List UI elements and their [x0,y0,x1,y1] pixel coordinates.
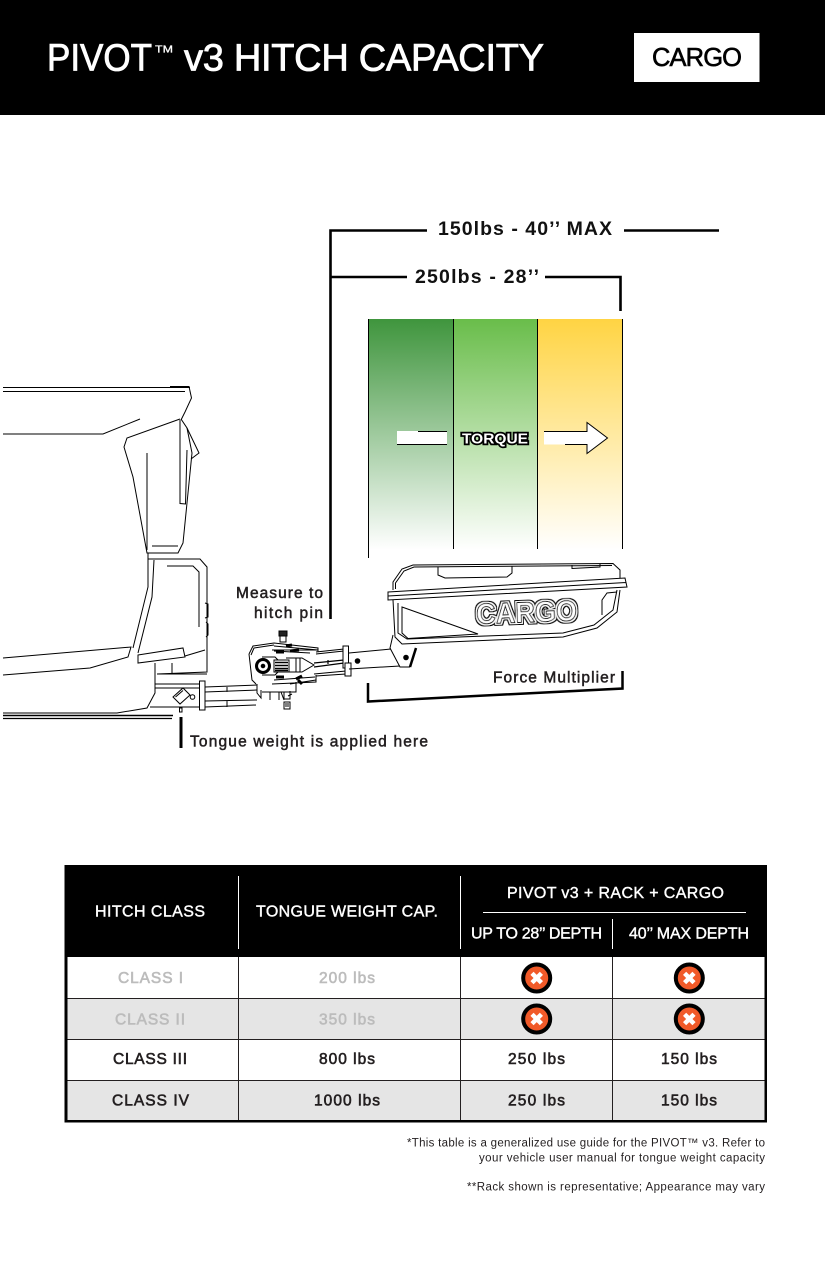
body [393,590,620,644]
row: class I: 200 lbs [319,970,375,987]
footnotes [407,1138,765,1194]
title: TM [155,44,173,56]
force multiplier bracket [368,670,622,702]
label: measure to hitch pin: hitch pin [254,605,323,622]
row: class II: 350 lbs [319,1012,375,1028]
icon: not allowed [523,964,550,992]
dimension: 250lbs at 28 inch [330,266,620,311]
row: class IV: CLASS IV [112,1092,190,1110]
lid [393,564,620,590]
torque arrow [397,422,608,454]
row: class II: CLASS II [115,1012,185,1028]
title: v3 HITCH CAPACITY [184,38,544,80]
cargo badge [634,33,760,82]
label: tongue weight: Tongue weight is applied here [190,734,428,750]
icon: not allowed [676,1006,703,1032]
capacity table [64,865,767,1122]
row: class II [115,1006,703,1032]
row: class III: 800 lbs [319,1051,375,1068]
row: class IV: 150 lbs [661,1092,717,1110]
icon: not allowed [523,1006,550,1032]
icon: not allowed [676,964,703,992]
label: tongue weight [180,717,428,750]
row: class III [113,1051,717,1068]
row: class III: CLASS III [113,1051,187,1068]
force multiplier bracket: Force Multiplier [493,670,615,686]
cargo logo: CARGO [476,595,578,631]
cargo box with rack mount [349,564,627,669]
label: measure to hitch pin: Measure to [236,585,323,602]
table rows background [68,957,764,1120]
header band [0,0,825,115]
row: class I: CLASS I [118,970,183,987]
table header: 40’’ MAX DEPTH [629,926,749,942]
cargo badge: CARGO [652,44,742,72]
mount arm [349,635,416,669]
row: class IV [112,1092,717,1110]
table header: TONGUE WEIGHT CAP. [256,904,438,920]
torque arrow: TORQUE [462,432,528,448]
row: class III: 250 lbs [508,1051,565,1068]
row: class I [118,964,703,992]
footnotes: **Rack shown is representative; Appearance may vary [467,1182,765,1194]
rim [388,578,627,600]
dimension: 150lbs at 40 inch max: 150lbs - 40’’ MAX [438,218,612,240]
title: PIVOT [47,38,152,80]
footnotes: *This table is a generalized use guide for the PIVOT™ v3. Refer to [407,1138,765,1150]
torque gradient zones [368,319,622,558]
pivot hitch mechanism [249,631,351,709]
row: class IV: 250 lbs [508,1092,565,1110]
row: class III: 150 lbs [661,1051,717,1068]
table header: UP TO 28’’ DEPTH [471,926,602,942]
receiver tube and hitch pin [150,681,257,712]
dimension: 150lbs at 40 inch max [330,218,719,619]
table header: HITCH CLASS [95,904,205,920]
table header [95,876,749,949]
table header: PIVOT v3 + RACK + CARGO [507,885,724,902]
footnotes: your vehicle user manual for tongue weight capacity [479,1152,765,1164]
row: class IV: 1000 lbs [314,1092,380,1110]
label: measure to hitch pin [236,585,323,622]
dimension: 250lbs at 28 inch: 250lbs - 28’’ [415,266,539,288]
truck rear line drawing [3,386,208,718]
